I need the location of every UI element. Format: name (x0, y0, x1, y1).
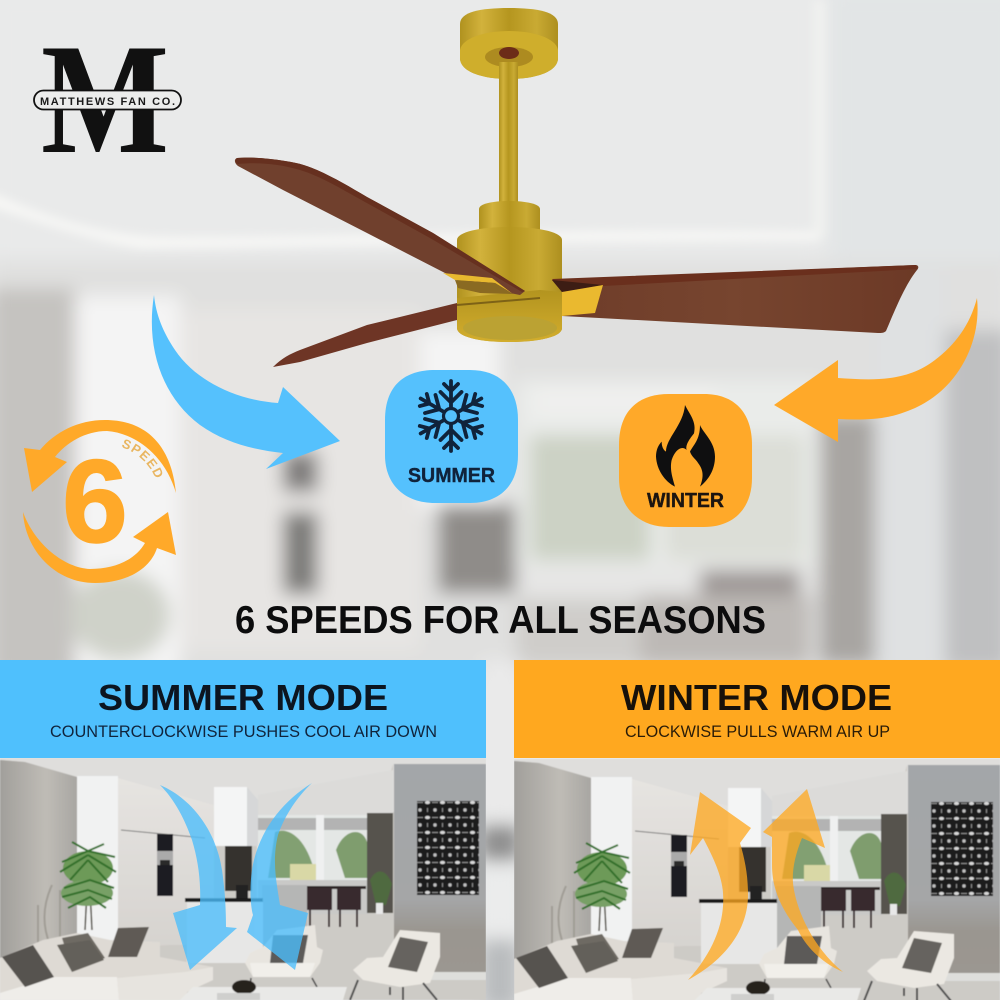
icon: flame (656, 405, 715, 487)
badge: winter: WINTER (647, 490, 725, 512)
panel: winter mode (514, 660, 1000, 1000)
right blade (552, 265, 918, 333)
winter header: CLOCKWISE PULLS WARM AIR UP (625, 723, 890, 741)
winter header: WINTER MODE (621, 677, 892, 718)
winter header (514, 660, 1000, 758)
panel: summer mode (0, 660, 486, 1000)
summer header: SUMMER MODE (98, 677, 388, 718)
icon: 6 speed (23, 420, 176, 583)
logo: Matthews Fan Co.: M (41, 12, 169, 187)
winter airflow arrows (688, 789, 843, 980)
top arrow (24, 420, 176, 493)
upper left blade (235, 158, 525, 295)
bottom arrow (23, 512, 176, 583)
downrod (499, 62, 518, 202)
arrow: winter orange (774, 298, 978, 442)
arrow: summer blue (152, 295, 340, 469)
badge: summer (385, 370, 518, 503)
headline: 6 SPEEDS FOR ALL SEASONS (235, 599, 766, 642)
summer header: COUNTERCLOCKWISE PUSHES COOL AIR DOWN (50, 723, 437, 741)
icon: snowflake (415, 381, 487, 451)
summer room photo (0, 758, 486, 1000)
winter room photo (514, 759, 1000, 1000)
icon: 6 speed: SPEED (122, 440, 162, 478)
badge: summer: SUMMER (408, 465, 496, 487)
badge: winter (619, 394, 752, 527)
summer airflow arrows (160, 783, 312, 970)
icon: 6 speed: 6 (62, 436, 128, 568)
logo: Matthews Fan Co.: MATTHEWS FAN CO. (40, 96, 175, 108)
lower left blade (273, 303, 457, 367)
canopy (460, 8, 558, 79)
motor housing (457, 201, 562, 342)
ceiling fan (235, 8, 918, 367)
summer header (0, 660, 486, 758)
